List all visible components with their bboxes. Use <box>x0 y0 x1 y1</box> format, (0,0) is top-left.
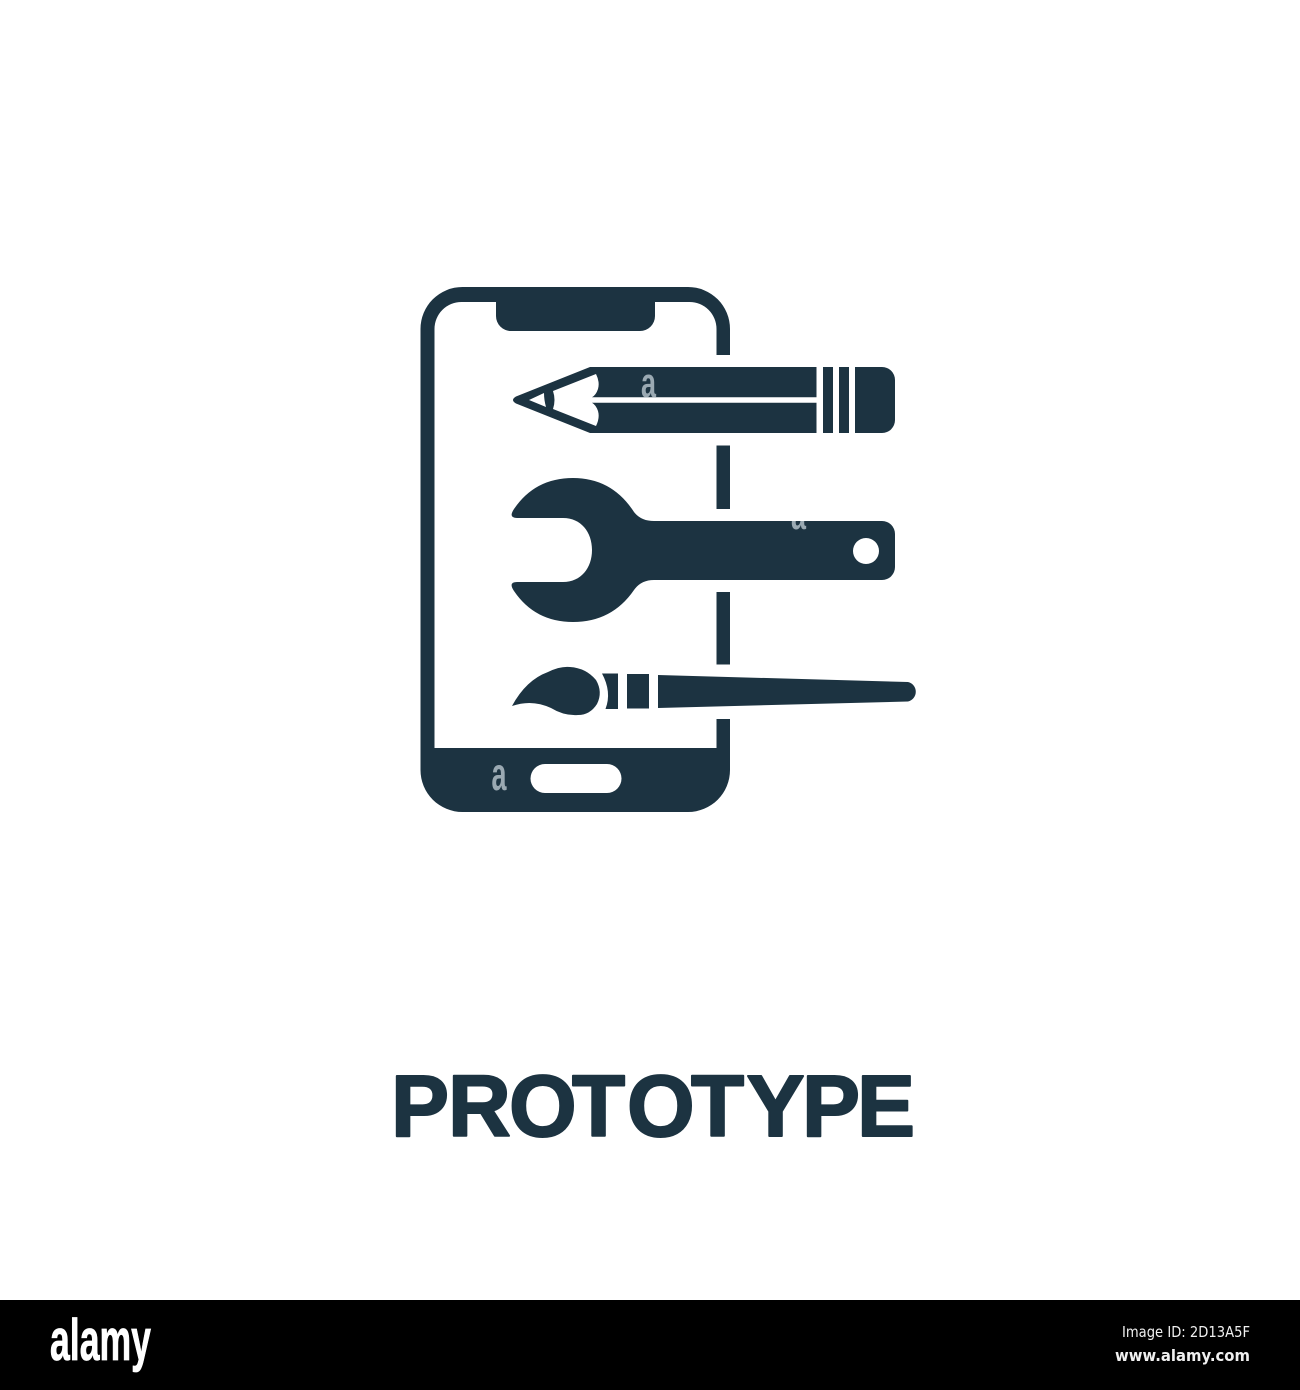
icon: pencil <box>513 367 895 433</box>
watermark: small letters: a <box>641 359 656 406</box>
infographic canvas <box>0 287 1300 1390</box>
image id: Image ID: 2D13A5F <box>1122 1323 1250 1341</box>
title: PROTOTYPE <box>391 1058 915 1155</box>
watermark: small letters: a <box>791 491 806 538</box>
watermark: small letters <box>492 359 806 800</box>
icon: prototype smartphone with tools <box>420 287 916 812</box>
website: www.alamy.com <box>1115 1346 1250 1365</box>
icon: wrench <box>512 478 895 622</box>
watermark: small letters: a <box>492 748 507 800</box>
logo: alamy: alamy <box>50 1308 151 1373</box>
icon: smartphone body <box>420 287 730 812</box>
footer bar <box>0 1300 1300 1390</box>
icon: paintbrush <box>512 667 916 715</box>
